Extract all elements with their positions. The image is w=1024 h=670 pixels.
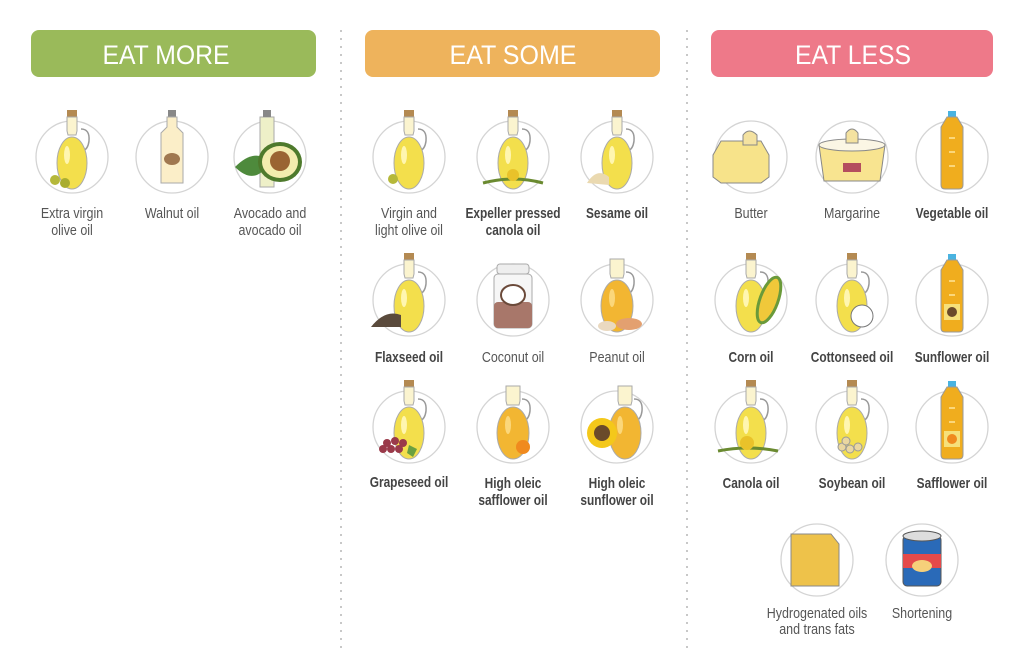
item: high oleic sunflower: sunflower oil xyxy=(580,492,654,508)
item: butter: Butter xyxy=(734,205,768,221)
item: safflower oil: Safflower oil xyxy=(917,475,987,491)
header: eat less xyxy=(711,30,993,77)
header: eat less: EAT LESS xyxy=(795,40,911,70)
item: shortening: Shortening xyxy=(892,605,952,621)
item: virgin and light olive oil: Virgin and xyxy=(381,205,437,221)
item: hydrogenated oils: Hydrogenated oils xyxy=(767,605,867,621)
item: vegetable oil xyxy=(916,111,988,221)
item: high oleic sunflower xyxy=(580,386,654,508)
item: extra virgin olive oil xyxy=(36,110,108,238)
item: coconut xyxy=(477,264,549,365)
item: peanut xyxy=(581,259,653,365)
item: corn: Corn oil xyxy=(729,349,773,365)
item: high oleic safflower: High oleic xyxy=(485,475,541,491)
item: expeller pressed canola oil xyxy=(465,110,561,238)
header: eat some: EAT SOME xyxy=(450,40,576,70)
item: flaxseed xyxy=(371,253,445,365)
item: sunflower oil: Sunflower oil xyxy=(915,349,989,365)
item: sesame oil xyxy=(581,110,653,221)
item: sunflower oil xyxy=(915,254,989,365)
header: eat more xyxy=(31,30,316,77)
header: eat more: EAT MORE xyxy=(102,40,230,70)
item: expeller pressed canola oil: Expeller pressed xyxy=(465,205,561,221)
item: high oleic safflower: safflower oil xyxy=(478,492,548,508)
item: walnut oil xyxy=(136,110,208,221)
item: sesame oil: Sesame oil xyxy=(586,205,648,221)
item: canola: Canola oil xyxy=(723,475,779,491)
item: soybean xyxy=(816,380,888,491)
header: eat some xyxy=(365,30,660,77)
item: virgin and light olive oil: light olive oil xyxy=(375,222,443,238)
dividers xyxy=(341,30,687,650)
item: shortening xyxy=(886,524,958,621)
item: coconut: Coconut oil xyxy=(482,349,544,365)
item: canola xyxy=(715,380,787,491)
item: cottonseed: Cottonseed oil xyxy=(811,349,893,365)
item: high oleic sunflower: High oleic xyxy=(589,475,645,491)
item: grapeseed: Grapeseed oil xyxy=(370,474,448,490)
item: virgin and light olive oil xyxy=(373,110,445,238)
item: peanut: Peanut oil xyxy=(589,349,645,365)
item: avocado xyxy=(234,110,306,238)
item: extra virgin olive oil: olive oil xyxy=(51,222,93,238)
item: hydrogenated oils xyxy=(767,524,867,637)
item: avocado: Avocado and xyxy=(234,205,306,221)
item: corn xyxy=(715,253,787,365)
item: cottonseed xyxy=(811,253,893,365)
item: butter xyxy=(713,121,787,221)
item: expeller pressed canola oil: canola oil xyxy=(486,222,540,238)
item: margarine: Margarine xyxy=(824,205,880,221)
item: flaxseed: Flaxseed oil xyxy=(375,349,443,365)
item: safflower oil xyxy=(916,381,988,491)
item: grapeseed xyxy=(370,380,448,490)
item: high oleic safflower xyxy=(477,386,549,508)
item: hydrogenated oils: and trans fats xyxy=(779,621,855,637)
item: walnut oil: Walnut oil xyxy=(145,205,199,221)
item: vegetable oil: Vegetable oil xyxy=(916,205,988,221)
item: margarine xyxy=(816,121,888,221)
item: avocado: avocado oil xyxy=(238,222,302,238)
item: soybean: Soybean oil xyxy=(819,475,885,491)
item: extra virgin olive oil: Extra virgin xyxy=(41,205,103,221)
